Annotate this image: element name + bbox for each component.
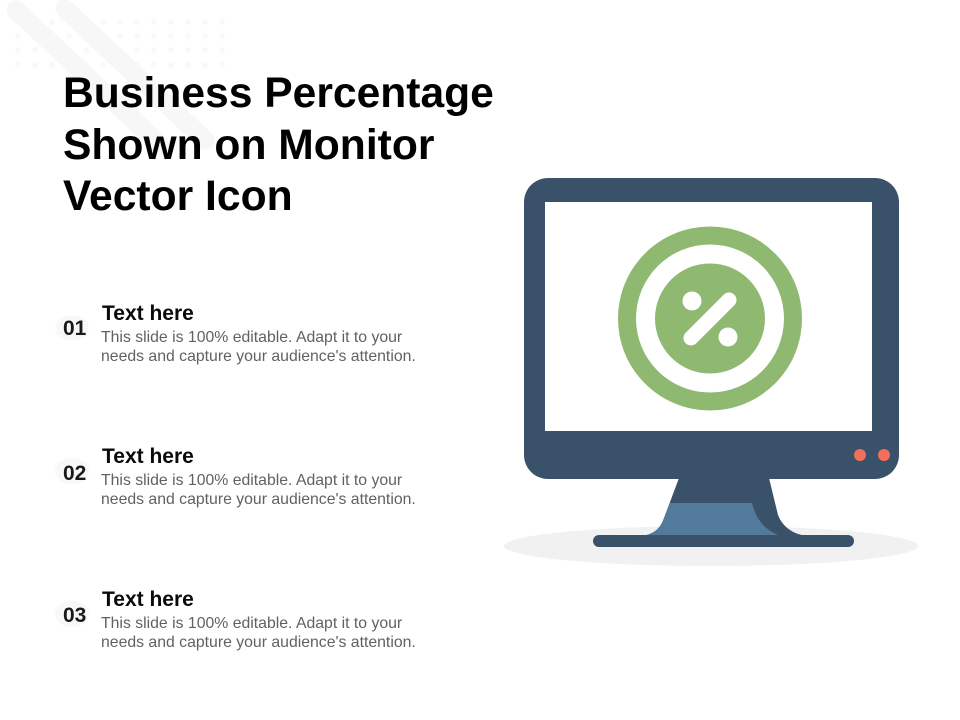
percentage badge [618,226,802,410]
item 02 [63,445,416,508]
item 02: needs and capture your audience's attention. [101,491,416,508]
title: Vector Icon [63,172,293,220]
monitor screen [545,202,872,431]
item 03: Text here [102,588,194,611]
monitor stand [593,478,854,547]
item 02: This slide is 100% editable. Adapt it to your [101,472,402,489]
title [63,69,494,220]
item 03: needs and capture your audience's attention. [101,634,416,651]
item 01: needs and capture your audience's attention. [101,348,416,365]
item 02: Text here [102,445,194,468]
item 02: 02 [63,462,86,485]
title: Business Percentage [63,69,494,117]
item 01: Text here [102,302,194,325]
monitor shadow [504,526,918,566]
monitor body [524,178,899,479]
item 03: This slide is 100% editable. Adapt it to your [101,615,402,632]
item 03 [63,588,416,651]
decorative background pattern [0,0,260,170]
indicator lights [854,449,890,461]
icon: monitor with percentage [504,178,918,566]
item 01: This slide is 100% editable. Adapt it to your [101,329,402,346]
item 03: 03 [63,604,86,627]
title: Shown on Monitor [63,120,434,168]
item 01: 01 [63,317,86,340]
item 01 [63,302,416,365]
